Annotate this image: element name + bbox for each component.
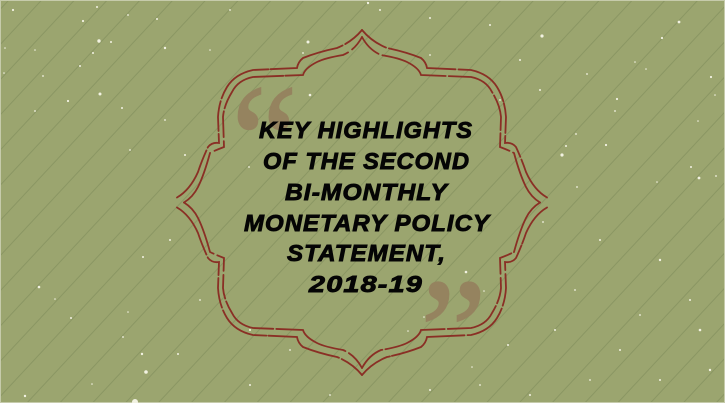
title: 2018-19 — [308, 271, 423, 297]
title: MONETARY POLICY — [244, 210, 492, 236]
title: STATEMENT, — [287, 240, 446, 266]
title: OF THE SECOND — [263, 148, 470, 174]
title — [244, 117, 492, 297]
opening quotation mark: “ — [231, 51, 298, 231]
ornamental double-line frame — [177, 30, 547, 375]
title: BI-MONTHLY — [285, 179, 450, 205]
title: KEY HIGHLIGHTS — [259, 117, 473, 143]
